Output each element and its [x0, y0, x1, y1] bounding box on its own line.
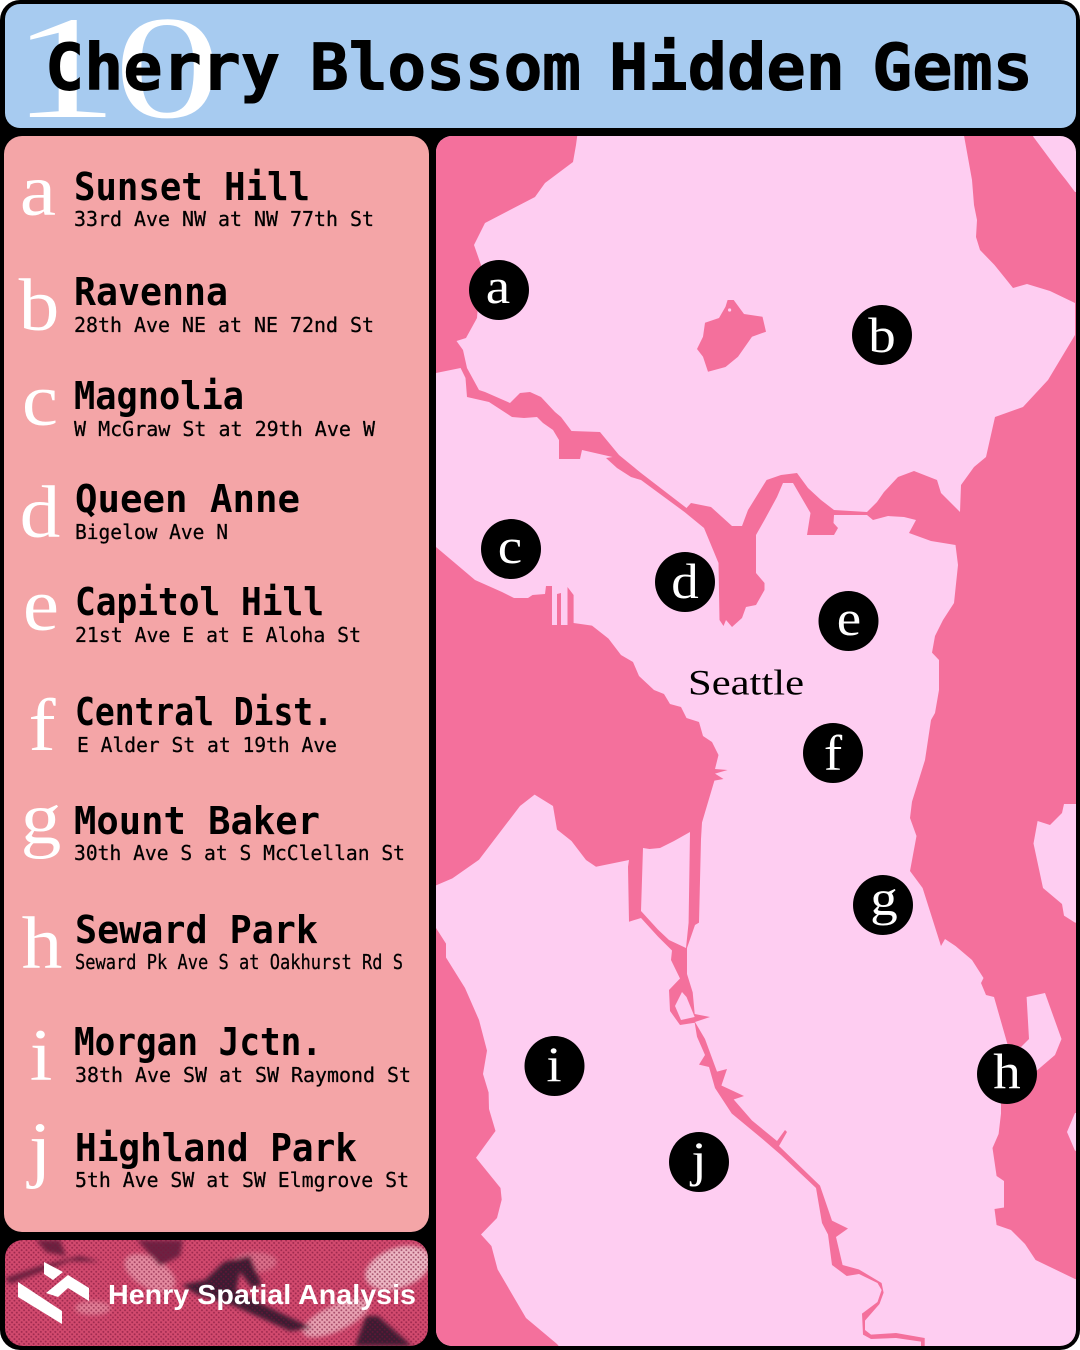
list item g: g	[21, 777, 61, 859]
list item a: 33rd Ave NW at NW 77th St	[74, 207, 374, 231]
marker f	[803, 723, 863, 783]
marker i: i	[546, 1037, 562, 1092]
list item f: E Alder St at 19th Ave	[77, 733, 337, 757]
water: West Seattle coast	[430, 922, 562, 1350]
marker g: g	[870, 871, 898, 926]
marker b	[852, 305, 912, 365]
list item e	[23, 564, 361, 647]
list item e: e	[23, 564, 59, 646]
marker c	[481, 519, 541, 579]
water: Puget Sound north, ship canal, Lake Washington	[436, 130, 1080, 1280]
icon: logo	[18, 1262, 89, 1324]
marker j	[669, 1132, 729, 1192]
marker b: b	[868, 308, 896, 363]
marker j: j	[689, 1132, 707, 1187]
list item i: Morgan Jctn.	[74, 1020, 322, 1064]
list item c: c	[22, 359, 58, 441]
list item j: j	[26, 1107, 51, 1189]
list item f	[28, 684, 337, 766]
title	[45, 32, 1033, 106]
title: Blossom	[310, 32, 581, 106]
list item a: Sunset Hill	[74, 165, 310, 209]
marker d: d	[671, 554, 699, 609]
water: Elliott Bay and Duwamish River	[430, 541, 925, 1350]
list item i: i	[30, 1014, 52, 1096]
list item c: W McGraw St at 29th Ave W	[74, 417, 376, 441]
marker g	[853, 871, 913, 935]
land: Harbor Island	[641, 832, 690, 948]
list item g	[21, 777, 405, 865]
marker c: c	[498, 519, 522, 574]
list item b: Ravenna	[74, 270, 228, 314]
list item c	[22, 359, 376, 441]
list item h: Seward Park	[75, 908, 318, 952]
list item b: b	[19, 264, 59, 346]
land: river island	[675, 992, 695, 1020]
list item a	[20, 149, 374, 231]
marker h	[977, 1044, 1037, 1104]
panel: map of Seattle	[430, 130, 1080, 1350]
marker e	[818, 591, 878, 651]
list item j	[26, 1107, 409, 1192]
list item g: Mount Baker	[74, 799, 320, 843]
header panel	[5, 0, 1076, 149]
title: Cherry	[45, 32, 280, 106]
list item e: 21st Ave E at E Aloha St	[75, 623, 361, 647]
list item d: Queen Anne	[75, 477, 300, 521]
marker e: e	[837, 591, 861, 646]
water: Green Lake	[697, 300, 766, 372]
marker h: h	[993, 1044, 1021, 1099]
list item j: 5th Ave SW at SW Elmgrove St	[75, 1168, 409, 1192]
list item d: Bigelow Ave N	[75, 520, 228, 544]
panel: footer branding	[5, 1238, 437, 1346]
list item h: h	[22, 902, 62, 984]
map label: Seattle: Seattle	[688, 662, 804, 702]
list item g: 30th Ave S at S McClellan St	[74, 841, 405, 865]
list item b	[19, 264, 374, 346]
title: Hidden	[609, 32, 845, 106]
marker i	[524, 1036, 584, 1096]
list item d	[20, 471, 300, 553]
list item c: Magnolia	[74, 374, 244, 418]
list item i: 38th Ave SW at SW Raymond St	[75, 1063, 411, 1087]
panel: location list	[4, 136, 429, 1232]
list item j: Highland Park	[75, 1126, 357, 1170]
list item i	[30, 1014, 411, 1096]
list item b: 28th Ave NE at NE 72nd St	[74, 313, 374, 337]
marker f: f	[824, 726, 843, 781]
list item f: Central Dist.	[75, 690, 333, 734]
list item h: Seward Pk Ave S at Oakhurst Rd S	[75, 950, 403, 974]
marker a: a	[486, 259, 510, 314]
list item h	[22, 902, 403, 984]
list item a: a	[20, 149, 56, 231]
list item e: Capitol Hill	[75, 580, 324, 624]
title: Gems	[872, 32, 1033, 106]
marker a	[469, 259, 529, 320]
list item f: f	[28, 684, 56, 766]
marker d	[655, 552, 715, 612]
list item d: d	[20, 471, 60, 553]
brand name: Henry Spatial Analysis	[108, 1279, 416, 1310]
